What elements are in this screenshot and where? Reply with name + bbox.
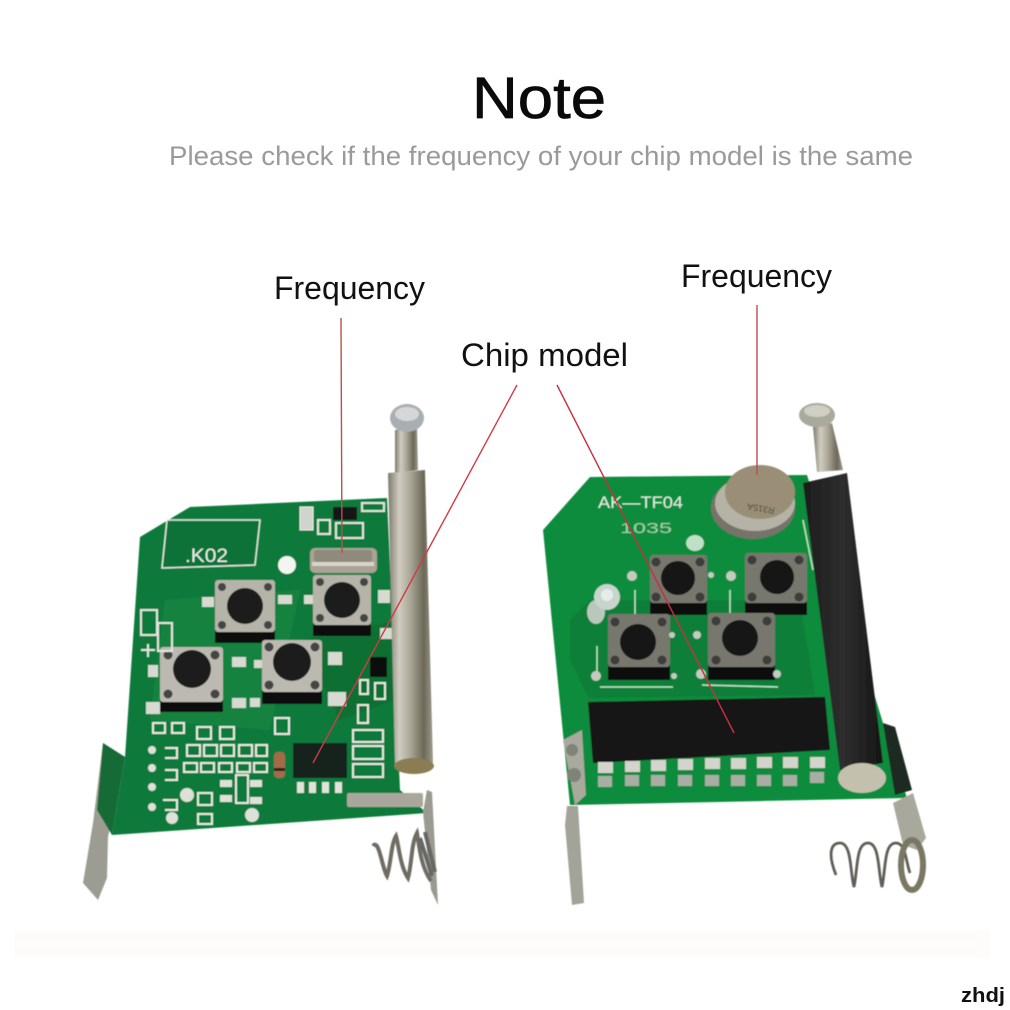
crystal [310,548,377,573]
subtitle: Please check if the frequency of your chip model is the same [169,141,913,171]
button 2 [313,575,371,636]
right PCB [543,475,907,805]
black clip edge [883,723,912,795]
antenna stub [799,403,843,472]
watermark: zhdj [961,985,1005,1007]
button 4 [262,640,322,704]
left antenna [388,404,434,774]
side contact [563,730,586,805]
chip pins [598,757,825,787]
label box .K02 [162,520,260,568]
right board left clip [565,806,584,905]
button R2 [745,553,807,615]
label: chip model: Chip model [461,337,628,373]
panel: left circuit board: .K02 [185,546,228,567]
right clip [893,793,926,850]
silkscreen text 1035: 1035 [620,520,672,537]
lower left solder points [148,746,262,824]
button R1 [650,555,707,615]
title: Note [472,66,606,131]
button R3 [608,614,670,680]
top components [300,503,384,538]
right side pads [353,680,385,777]
label: left frequency: Frequency [274,270,425,306]
LED [587,584,620,624]
button 1 [215,580,275,643]
pointer line: left frequency [341,318,342,553]
rod end cap [838,763,886,793]
label: right frequency: Frequency [681,258,832,294]
right spring [831,840,923,890]
small transistor [370,657,387,677]
left clip [83,743,125,900]
pointer line: chip model to right chip [557,385,734,733]
right clip [423,790,438,905]
crystal can [711,465,795,539]
silkscreen text AK-TF04: AK—TF04 [598,493,683,512]
faint table reflection band [15,930,990,958]
panel: left circuit board [83,404,438,905]
button R4 [708,613,775,680]
solder pads around the buttons [146,590,392,714]
solder blobs [591,571,781,681]
left PCB [112,498,427,835]
left spring [373,832,435,881]
panel: right circuit board [543,403,926,905]
pointer line: right frequency [756,305,758,475]
traces [597,520,813,687]
LED pads [141,610,172,657]
crystal can: R315A [746,501,775,516]
large chip [588,697,830,763]
left chip [293,743,347,793]
diode [274,752,285,778]
bottom contact bar [347,793,423,807]
right mounting hole [686,535,704,551]
mounting hole [278,556,296,574]
ferrite rod [803,473,883,770]
lower left pads [153,718,289,824]
button 3 [160,647,223,712]
pointer line: chip model to left chip [313,385,517,763]
